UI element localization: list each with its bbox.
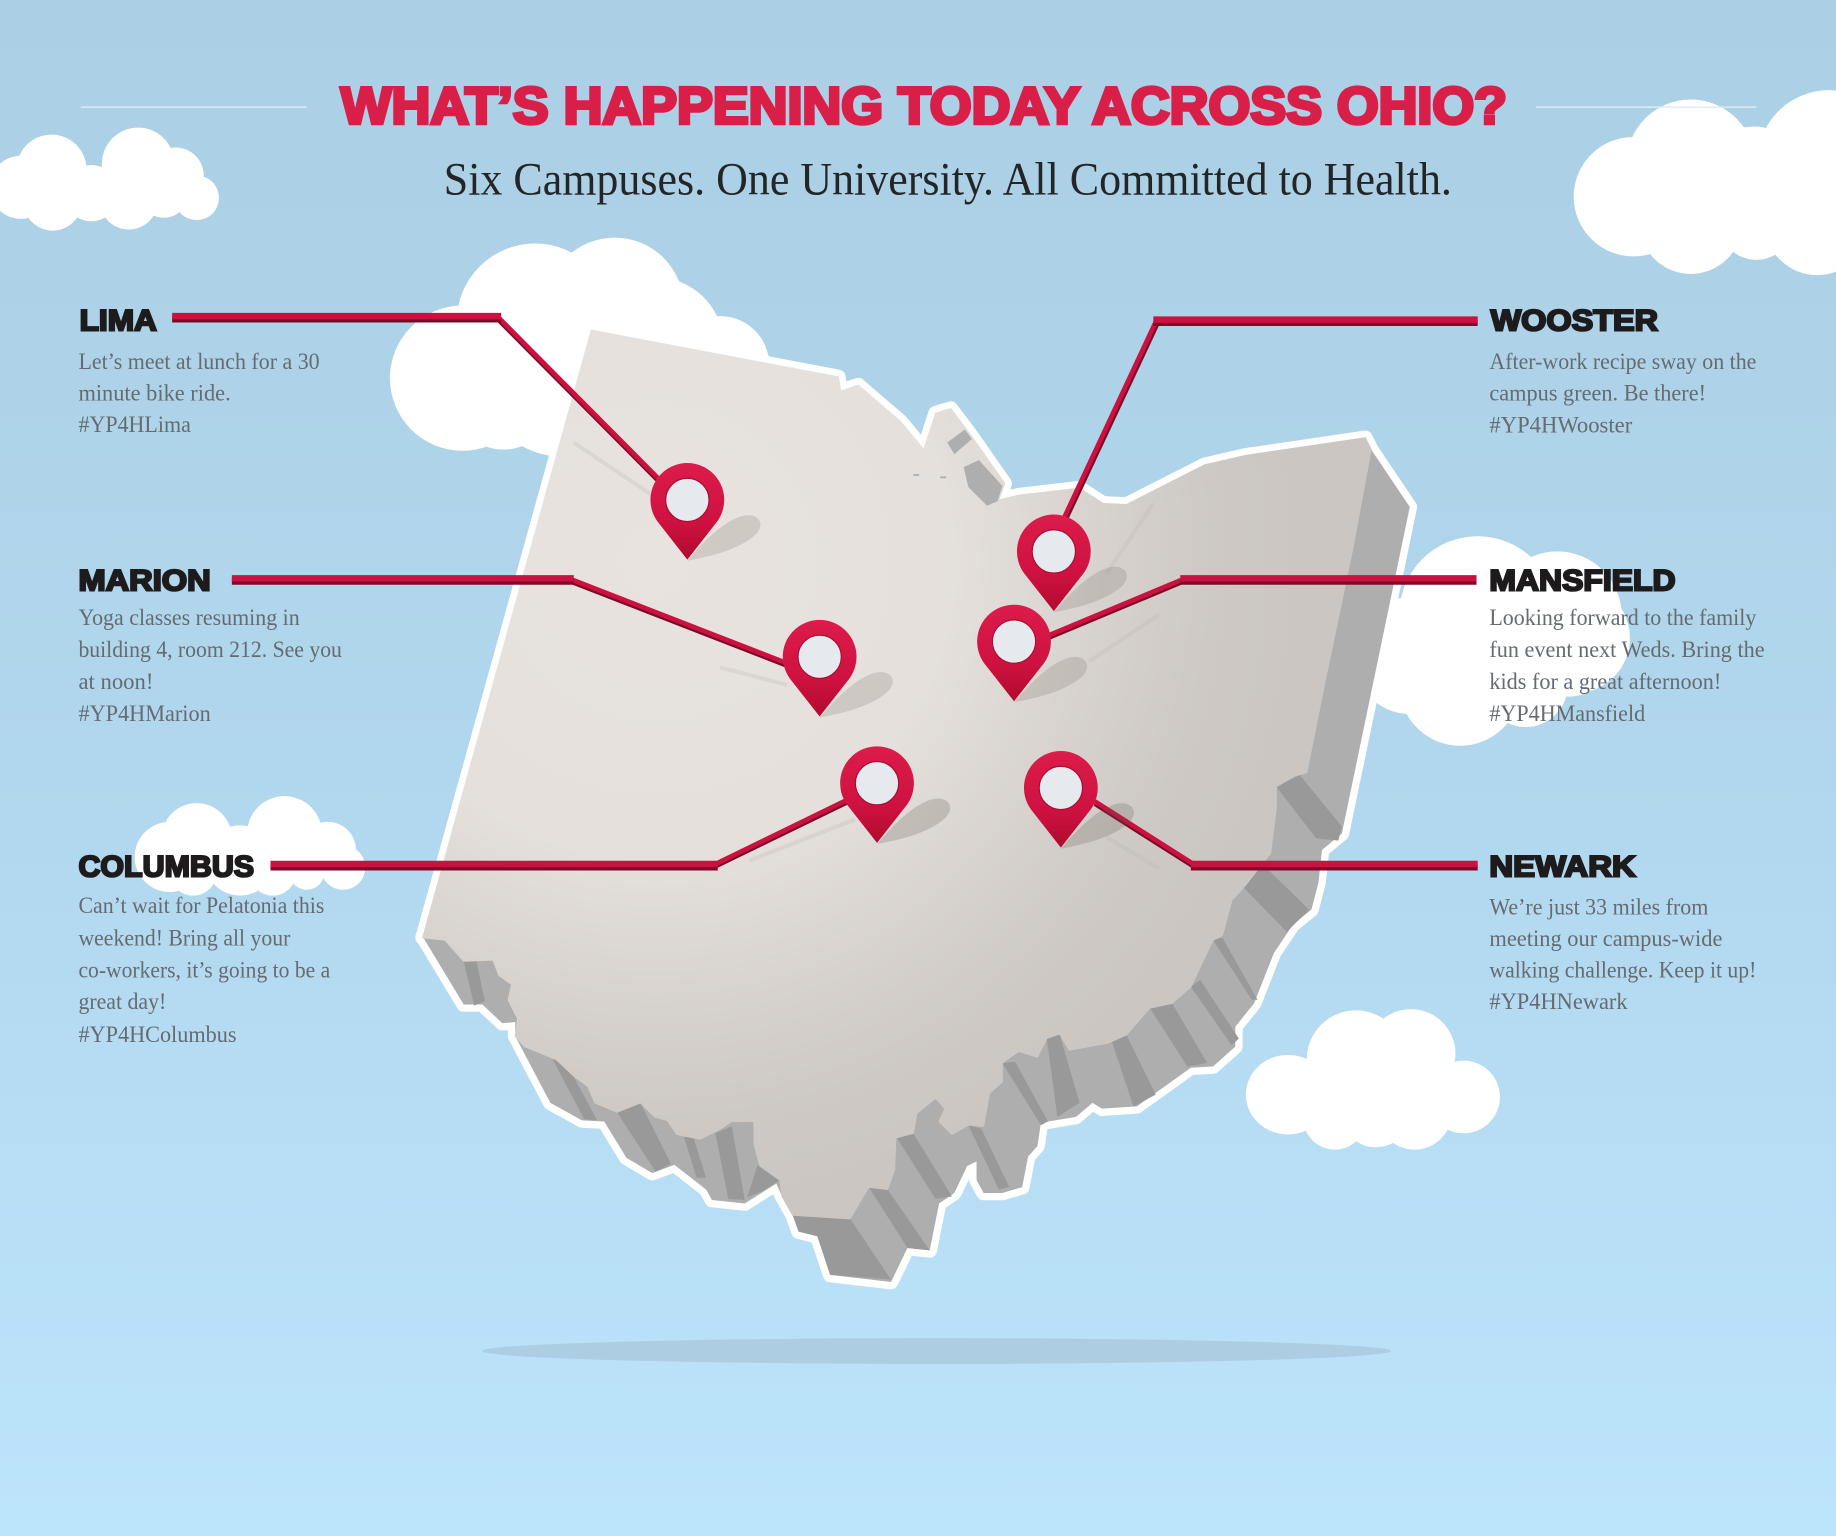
connector: newark [1095, 801, 1478, 868]
connector: lima [172, 316, 662, 484]
text block: lima: #YP4HLima [78, 412, 191, 438]
text block: mansfield [1489, 566, 1765, 727]
text block: marion: building 4, room 212. See you [78, 637, 342, 663]
text block: columbus: great day! [78, 989, 166, 1015]
text block: lima: Let’s meet at lunch for a 30 [78, 349, 320, 375]
text block: newark: meeting our campus-wide [1489, 926, 1722, 952]
text block: wooster [1489, 306, 1756, 439]
pin: lima [650, 463, 760, 561]
text block: lima [78, 306, 320, 438]
text block: marion [78, 566, 342, 727]
connector shadows [574, 443, 1159, 869]
text block: marion: Yoga classes resuming in [78, 605, 300, 631]
text block: wooster: campus green. Be there! [1489, 380, 1706, 406]
map side shading bands [464, 775, 1342, 1280]
pin: mansfield [977, 605, 1087, 702]
pin: marion [783, 620, 893, 718]
text block: mansfield: Looking forward to the family [1489, 605, 1757, 631]
connector: mansfield [1049, 578, 1477, 637]
text block: columbus: Can’t wait for Pelatonia this [78, 893, 324, 919]
text block: marion: MARION [78, 566, 211, 598]
text block: marion: at noon! [78, 669, 153, 695]
subtitle: Six Campuses. One University. All Committed to Health. [444, 154, 1452, 205]
connector: marion [232, 578, 787, 666]
text block: mansfield: fun event next Weds. Bring the [1489, 637, 1765, 663]
text block: newark: walking challenge. Keep it up! [1489, 958, 1756, 984]
text block: mansfield: kids for a great afternoon! [1489, 669, 1721, 695]
map side face [423, 450, 1410, 1282]
cloud: top right [1574, 90, 1836, 275]
text block: wooster: WOOSTER [1491, 306, 1658, 338]
ground shadow [482, 1338, 1391, 1364]
text block: mansfield: #YP4HMansfield [1489, 701, 1645, 727]
text block: mansfield: MANSFIELD [1489, 566, 1676, 598]
title rule left [81, 106, 307, 108]
text block: columbus: #YP4HColumbus [78, 1022, 237, 1048]
title: WHAT’S HAPPENING TODAY ACROSS OHIO? [341, 77, 1507, 135]
text block: newark: #YP4HNewark [1489, 989, 1628, 1015]
lake erie shoreline detail [913, 430, 1002, 506]
cloud: mansfield [1352, 536, 1630, 746]
title rule right [1536, 106, 1756, 108]
connector: wooster [1063, 320, 1478, 521]
cloud: top left [0, 128, 219, 231]
pin: newark [1024, 751, 1134, 849]
map top face [423, 330, 1371, 1219]
text block: newark: NEWARK [1489, 851, 1636, 883]
text block: columbus [78, 851, 331, 1048]
text block: columbus: COLUMBUS [78, 851, 254, 883]
text block: newark: We’re just 33 miles from [1489, 894, 1708, 920]
pin: columbus [840, 746, 950, 844]
text block: lima: LIMA [80, 306, 157, 338]
text block: newark [1489, 851, 1756, 1015]
cloud: bottom right [1246, 1009, 1500, 1150]
text block: columbus: weekend! Bring all your [78, 925, 291, 951]
connector: columbus [270, 799, 849, 868]
text block: marion: #YP4HMarion [78, 701, 211, 727]
cloud: behind map [390, 238, 769, 457]
ohio map [423, 330, 1410, 1282]
text block: columbus: co-workers, it’s going to be a [78, 958, 331, 984]
text block: wooster: After-work recipe sway on the [1489, 349, 1756, 375]
text block: lima: minute bike ride. [78, 380, 231, 406]
cloud: columbus [135, 796, 365, 896]
map white outline [423, 330, 1410, 1282]
text block: wooster: #YP4HWooster [1489, 413, 1632, 439]
pin: wooster [1017, 515, 1127, 612]
